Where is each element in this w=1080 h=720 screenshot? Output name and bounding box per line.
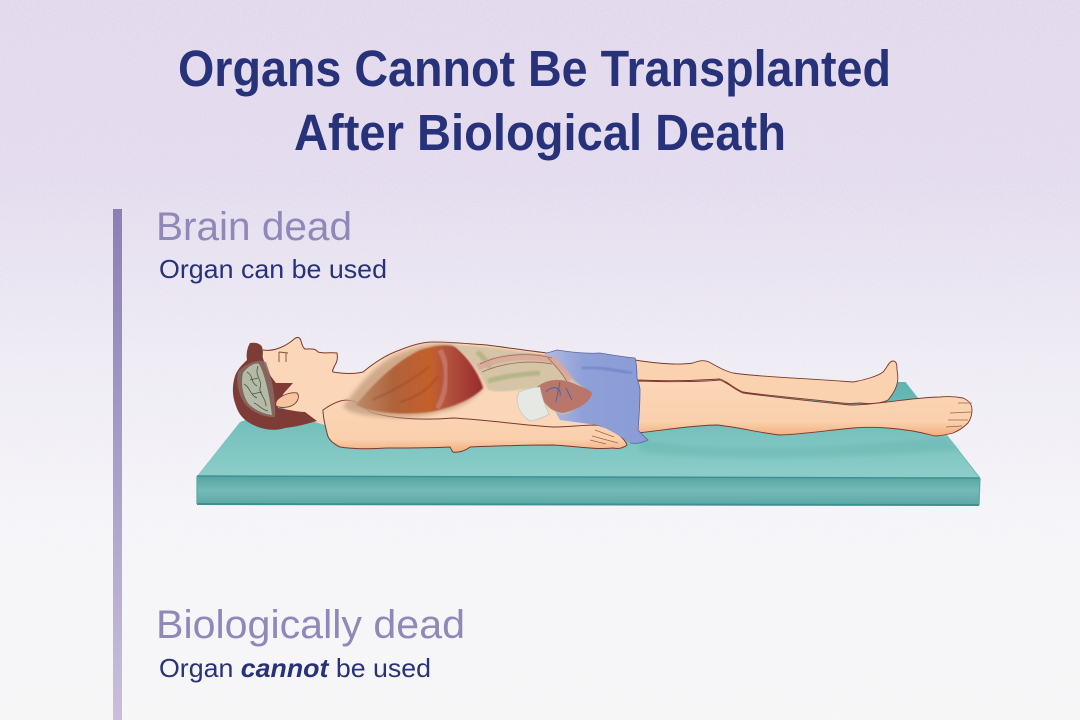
organ: lungs and liver [343,343,484,418]
title [178,40,891,161]
organ: intestines [453,345,592,414]
label: brain dead: Brain dead [156,205,352,249]
brain [237,361,275,417]
title: After Biological Death [294,104,786,161]
mat [197,382,980,505]
organ: bladder pouch [517,387,549,421]
toes [946,403,972,427]
torso and head skin [263,337,600,427]
label: biologically dead [156,603,465,683]
illustration: patient on mat [197,337,980,505]
title: Organs Cannot Be Transplanted [178,40,891,97]
arm [323,400,627,452]
label: brain dead: Organ can be used [159,254,387,284]
ear [276,393,298,407]
far leg [635,360,898,404]
hair [233,343,317,430]
label: biologically dead: Biologically dead [156,603,465,647]
neck, shoulder and jaw lines [263,337,547,374]
shorts [540,350,648,443]
near leg [637,380,972,436]
label: brain dead [156,205,387,284]
timeline bar [113,209,122,720]
label: biologically dead: Organ cannot be used [159,653,431,683]
